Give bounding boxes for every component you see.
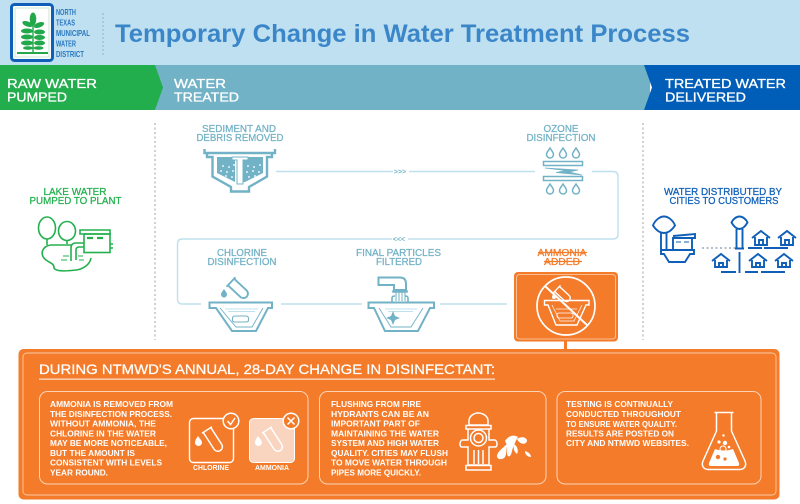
card: ammonia removed: YEAR ROUND.	[50, 467, 108, 477]
icon: ozone disinfection	[544, 148, 582, 194]
label: lake water: LAKE WATER	[44, 187, 106, 198]
card: flushing hydrants	[320, 392, 546, 484]
title: Temporary Change in Water Treatment Process	[115, 20, 690, 48]
card: flushing hydrants: PIPES MORE QUICKLY.	[331, 467, 421, 477]
card: flushing hydrants: QUALITY. CITIES MAY FLUSH	[331, 448, 448, 458]
label: chlorine disinfection: DISINFECTION	[208, 257, 276, 268]
label: final particles filtered: FINAL PARTICLES	[356, 248, 441, 259]
logo wordmark: WATER	[56, 38, 76, 48]
logo wordmark	[56, 7, 90, 59]
label: sediment	[196, 124, 284, 144]
label: ammonia added, struck through: ADDED	[544, 257, 580, 268]
card: ammonia removed: THE DISINFECTION PROCESS.	[50, 409, 172, 419]
panel heading: DURING NTMWD'S ANNUAL, 28-DAY CHANGE IN DISINFECTANT:	[39, 361, 495, 377]
logo wordmark: MUNICIPAL	[56, 28, 90, 38]
logo wordmark: NORTH	[56, 7, 76, 17]
stage band: raw water pumped: RAW WATER	[7, 76, 97, 91]
card: testing: RESULTS ARE POSTED ON	[566, 428, 674, 438]
label: ozone: DISINFECTION	[526, 133, 596, 144]
card: ammonia removed	[40, 392, 308, 484]
stage band: water treated: TREATED	[174, 90, 239, 104]
label: final particles filtered: FILTERED	[376, 257, 422, 268]
label: lake water: PUMPED TO PLANT	[30, 196, 122, 207]
icon: filter basin with faucet	[368, 278, 434, 331]
icon: ammonia removed: AMMONIA	[255, 465, 289, 472]
card: ammonia removed: MAY BE MORE NOTICEABLE,	[50, 438, 167, 448]
icon: chlorine allowed: CHLORINE	[193, 465, 229, 472]
logo wordmark: TEXAS	[56, 18, 75, 28]
panel: during annual change	[18, 349, 780, 500]
card: flushing hydrants: FLUSHING FROM FIRE	[331, 399, 421, 409]
stage band: water treated	[150, 65, 650, 110]
icon: chlorine allowed	[190, 413, 239, 472]
label: final particles filtered	[356, 248, 441, 268]
card: ammonia removed: AMMONIA IS REMOVED FROM	[50, 399, 173, 409]
icon: towers, pipes and houses	[653, 216, 796, 273]
stage band: treated water delivered: DELIVERED	[665, 90, 746, 104]
label: water distributed: WATER DISTRIBUTED BY	[664, 187, 782, 198]
label: chlorine disinfection	[208, 248, 276, 268]
card: flushing hydrants: HYDRANTS CAN BE AN	[331, 409, 429, 419]
label: ammonia added, struck through	[538, 248, 587, 268]
card: testing	[557, 392, 761, 484]
icon: lake, trees and pump	[38, 217, 113, 271]
card: ammonia removed: BUT THE AMOUNT IS	[50, 448, 135, 458]
card: testing: CITY AND NTMWD WEBSITES.	[566, 438, 689, 448]
stage band: treated water delivered	[644, 65, 800, 110]
card: testing: CONDUCTED THROUGHOUT	[566, 409, 682, 419]
label: ammonia added, struck through: AMMONIA	[538, 248, 587, 259]
logo wordmark: DISTRICT	[56, 49, 84, 59]
stage band: treated water delivered: TREATED WATER	[665, 76, 786, 91]
card: testing: TO ENSURE WATER QUALITY.	[566, 419, 677, 429]
icon: chlorine basin with test tube	[210, 277, 272, 331]
label: water distributed	[664, 187, 782, 207]
icon: sedimentation tank	[204, 149, 275, 192]
icon: flask	[702, 412, 746, 470]
icon: ammonia removed	[250, 413, 299, 472]
label: lake water	[30, 187, 122, 207]
flow line connecting treatment steps: <<<	[393, 236, 405, 244]
card: flushing hydrants: TO MOVE WATER THROUGH	[331, 458, 447, 468]
label: ozone: OZONE	[544, 124, 579, 135]
card: testing: TESTING IS CONTINUALLY	[566, 399, 673, 409]
header band	[0, 0, 800, 65]
card: flushing hydrants: MAINTAINING THE WATER	[331, 428, 439, 438]
icon: fire hydrant	[460, 413, 531, 470]
label: sediment: DEBRIS REMOVED	[196, 133, 284, 144]
callout: ammonia removed	[514, 272, 618, 342]
stage band: water treated: WATER	[174, 76, 226, 91]
flow line connecting treatment steps: >>>	[394, 169, 406, 176]
flow line connecting treatment steps	[178, 169, 618, 304]
card: ammonia removed: WITHOUT AMMONIA, THE	[50, 418, 156, 428]
label: sediment: SEDIMENT AND	[202, 124, 276, 135]
logo	[12, 4, 52, 60]
card: flushing hydrants: SYSTEM AND HIGH WATER	[331, 438, 439, 448]
stage band: raw water pumped	[0, 65, 163, 110]
label: chlorine disinfection: CHLORINE	[217, 248, 267, 259]
label: water distributed: CITIES TO CUSTOMERS	[670, 196, 779, 207]
card: ammonia removed: CHLORINE IN THE WATER	[50, 428, 156, 438]
card: ammonia removed: CONSISTENT WITH LEVELS	[50, 458, 162, 468]
stage band: raw water pumped: PUMPED	[7, 90, 67, 104]
card: flushing hydrants: IMPORTANT PART OF	[331, 418, 420, 428]
label: ozone	[526, 124, 596, 144]
